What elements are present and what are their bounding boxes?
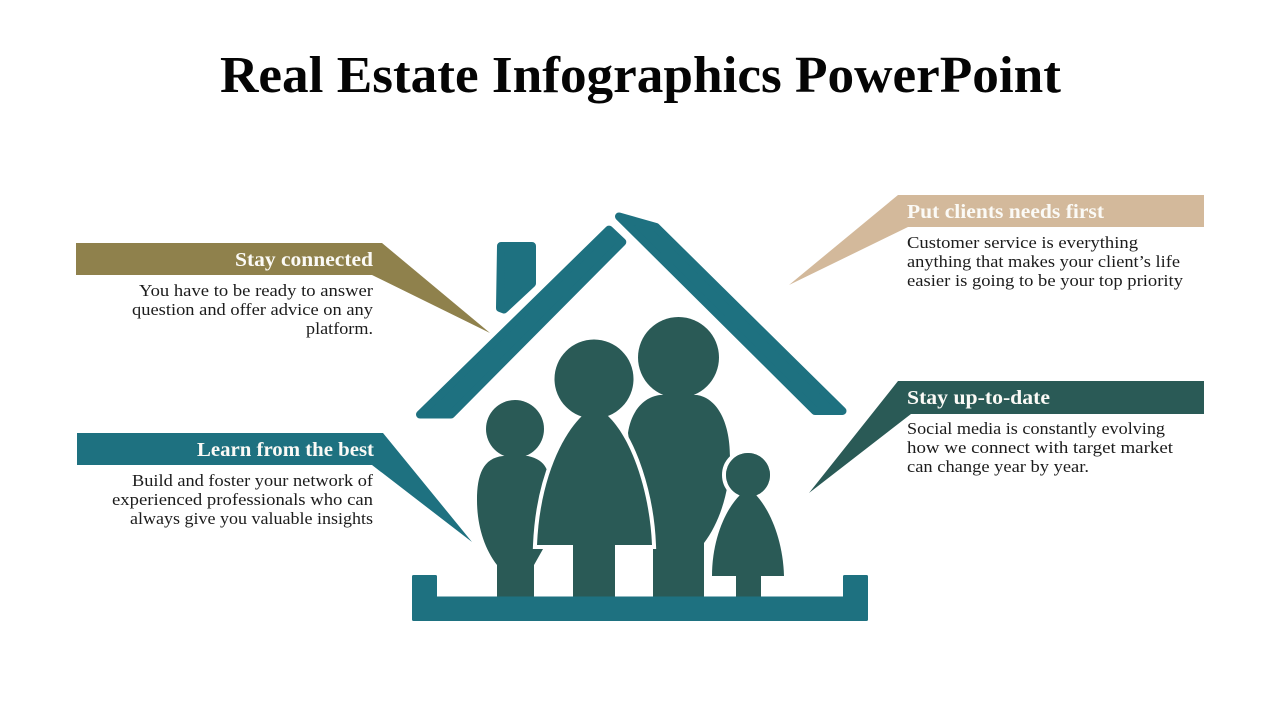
text block <box>907 419 1173 476</box>
panel: stay connected <box>76 243 490 338</box>
panel: stay up-to-date <box>809 381 1204 493</box>
callout banner <box>809 381 1204 493</box>
text block: Social media is constantly evolving <box>907 419 1166 438</box>
text block: Build and foster your network of <box>132 471 373 490</box>
icon: left roof slope <box>420 230 622 414</box>
text block: how we connect with target market <box>907 438 1173 457</box>
icon: girl figure <box>712 453 784 597</box>
icon: right roof slope <box>619 216 842 411</box>
text block: easier is going to be your top priority <box>907 271 1184 290</box>
text block: anything that makes your client’s life <box>907 252 1180 271</box>
heading: Stay connected <box>235 249 374 271</box>
text block: always give you valuable insights <box>130 509 373 528</box>
text block <box>132 281 374 338</box>
icon: house with family <box>414 216 866 620</box>
text block: can change year by year. <box>907 457 1089 476</box>
panel: learn from the best <box>77 433 472 542</box>
callout banner <box>76 243 490 333</box>
heading: Stay up-to-date <box>907 387 1050 409</box>
panel: put clients needs first <box>789 195 1204 290</box>
heading: Put clients needs first <box>907 201 1104 223</box>
text block: platform. <box>306 319 373 338</box>
heading: Learn from the best <box>197 439 374 461</box>
callout banner <box>789 195 1204 285</box>
text block: You have to be ready to answer <box>139 281 373 300</box>
icon: father figure <box>628 317 730 597</box>
icon: house base <box>414 576 866 620</box>
icon: mother figure <box>537 340 652 597</box>
text block: Customer service is everything <box>907 233 1139 252</box>
text block <box>907 233 1184 290</box>
callout banner <box>77 433 472 542</box>
text block: experienced professionals who can <box>112 490 374 509</box>
icon: chimney <box>500 246 532 310</box>
icon: boy figure <box>477 400 560 597</box>
text block: question and offer advice on any <box>132 300 374 319</box>
text block <box>112 471 374 528</box>
title: Real Estate Infographics PowerPoint <box>220 47 1062 104</box>
